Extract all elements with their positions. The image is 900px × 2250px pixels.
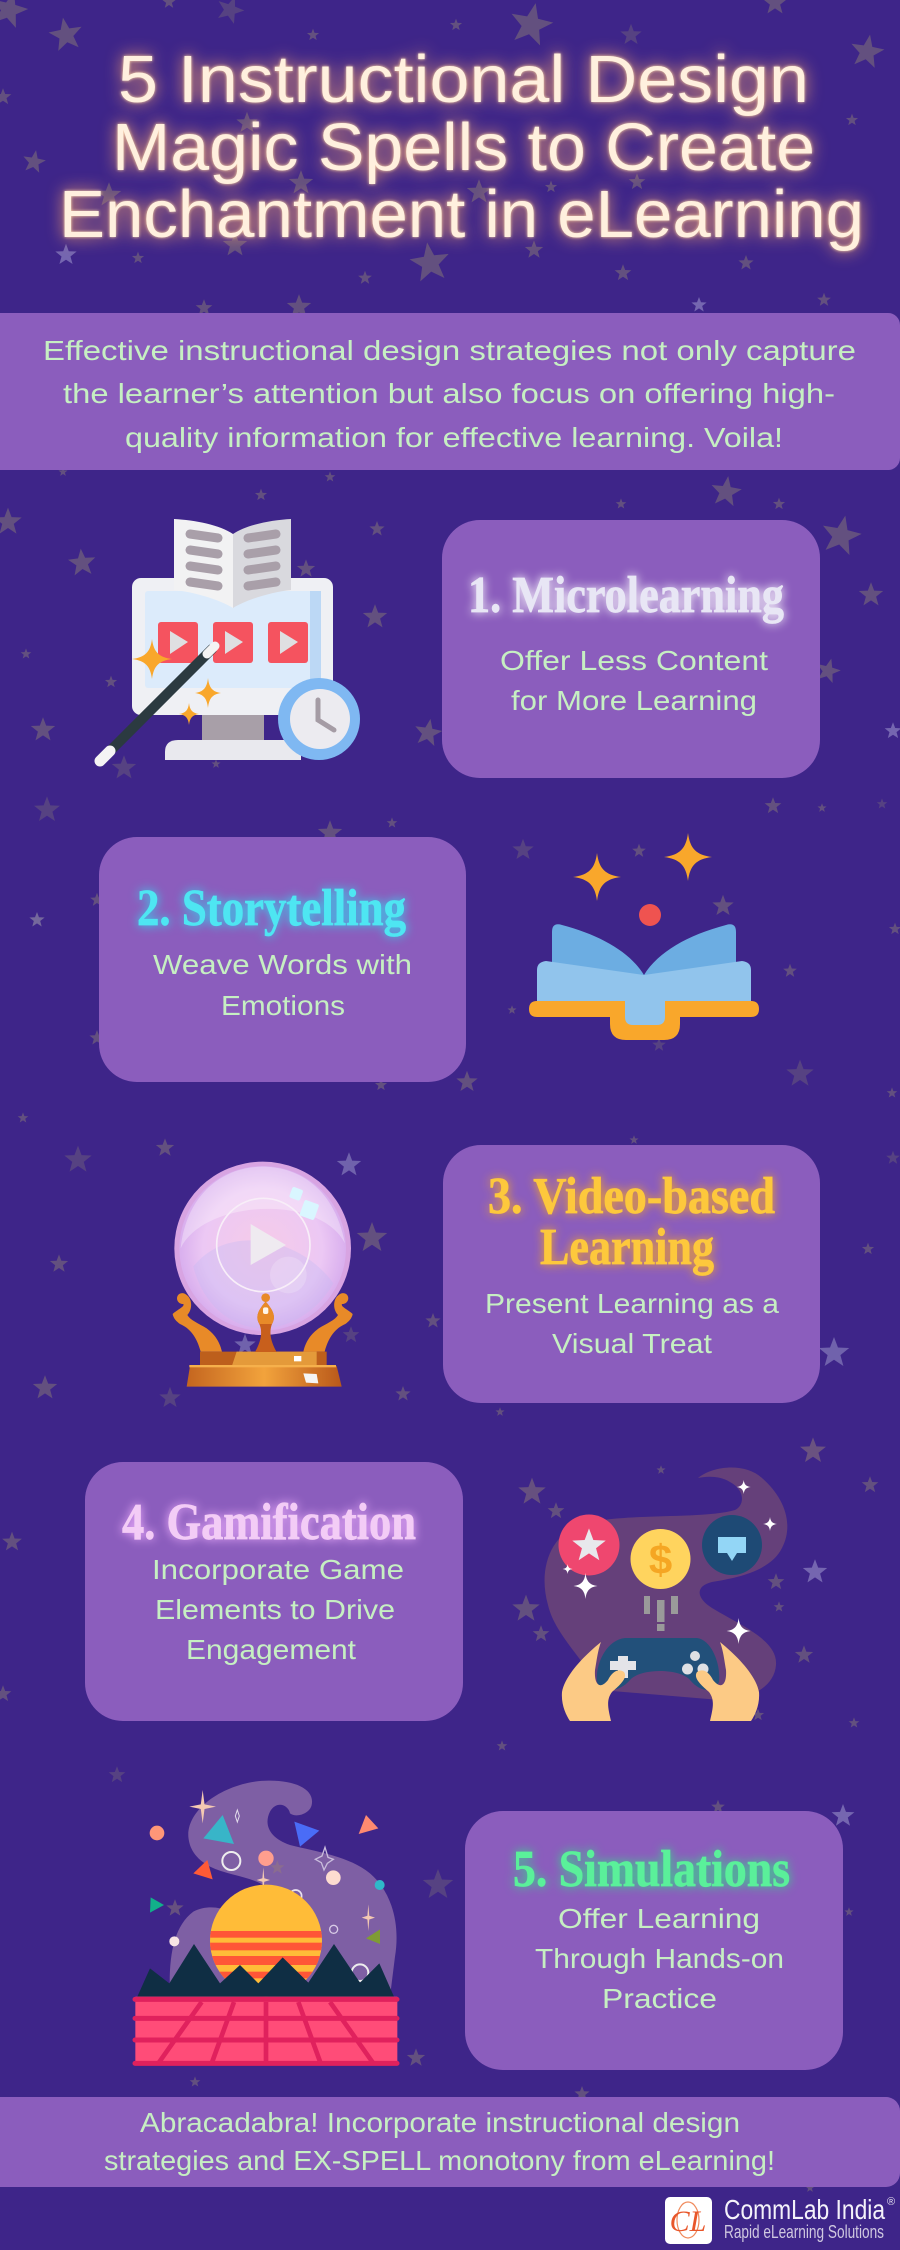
panel: 4 gamification: Engagement: [186, 1634, 356, 1665]
panel: 1 microlearning: 1. Microlearning: [468, 567, 784, 624]
panel: closing message: [0, 2097, 900, 2187]
video tiles: [158, 622, 308, 663]
panel: closing message: Abracadabra! Incorporate instructional design: [140, 2107, 740, 2138]
panel: 3 video-based learning: Visual Treat: [552, 1328, 712, 1359]
panel: introduction: Effective instructional design strategies not only capture: [43, 335, 856, 366]
panel: 3 video-based learning: Present Learning as a: [485, 1288, 779, 1319]
title: [59, 42, 864, 252]
book: [174, 519, 233, 608]
icon: monitor with book, wand and clock: [100, 519, 360, 761]
panel: 2 storytelling: Weave Words with: [153, 949, 412, 980]
clock: [278, 678, 360, 760]
title: Enchantment in eLearning: [59, 177, 864, 252]
panel: 1 microlearning: [442, 520, 820, 778]
panel: introduction: the learner’s attention but also focus on offering high-: [63, 378, 835, 409]
logo: CommLab India: CL: [670, 2205, 706, 2238]
logo: CommLab India: [665, 2194, 895, 2244]
panel: 5 simulations: 5. Simulations: [513, 1841, 790, 1898]
panel: 1 microlearning: for More Learning: [511, 685, 757, 716]
sparkles: [132, 639, 221, 725]
panel: 4 gamification: Elements to Drive: [155, 1594, 395, 1625]
panel: 4 gamification: 4. Gamification: [122, 1494, 416, 1551]
icon: simulation sun and grid: [135, 1781, 397, 2065]
panel: closing message: strategies and EX-SPELL monotony from eLearning!: [104, 2145, 775, 2176]
panel: 5 simulations: Offer Learning: [558, 1903, 760, 1934]
panel: 3 video-based learning: 3. Video-based: [488, 1168, 775, 1225]
panel: 2 storytelling: Emotions: [221, 990, 345, 1021]
title: 5 Instructional Design: [118, 42, 809, 117]
panel: introduction: [0, 313, 900, 470]
panel: 2 storytelling: [99, 837, 466, 1082]
logo: CommLab India: ®: [887, 2196, 895, 2208]
icon: open book with sparkles: [529, 833, 759, 1040]
panel: 5 simulations: [465, 1811, 843, 2070]
panel: 1 microlearning: Offer Less Content: [500, 645, 768, 676]
panel: 4 gamification: Incorporate Game: [152, 1554, 404, 1585]
icon: crystal ball: [173, 1162, 353, 1387]
panel: introduction: quality information for effective learning. Voila!: [125, 422, 783, 453]
panel: 3 video-based learning: [443, 1145, 820, 1403]
icon: game controller with hands: [545, 1467, 787, 1721]
wand: [103, 648, 213, 758]
icon: game controller with hands: $: [649, 1536, 672, 1583]
panel: 4 gamification: [85, 1462, 463, 1721]
panel: 5 simulations: Practice: [602, 1983, 717, 2014]
panel: 3 video-based learning: Learning: [540, 1219, 714, 1276]
title: Magic Spells to Create: [112, 110, 815, 185]
panel: 2 storytelling: 2. Storytelling: [137, 880, 406, 937]
panel: 5 simulations: Through Hands-on: [535, 1943, 784, 1974]
